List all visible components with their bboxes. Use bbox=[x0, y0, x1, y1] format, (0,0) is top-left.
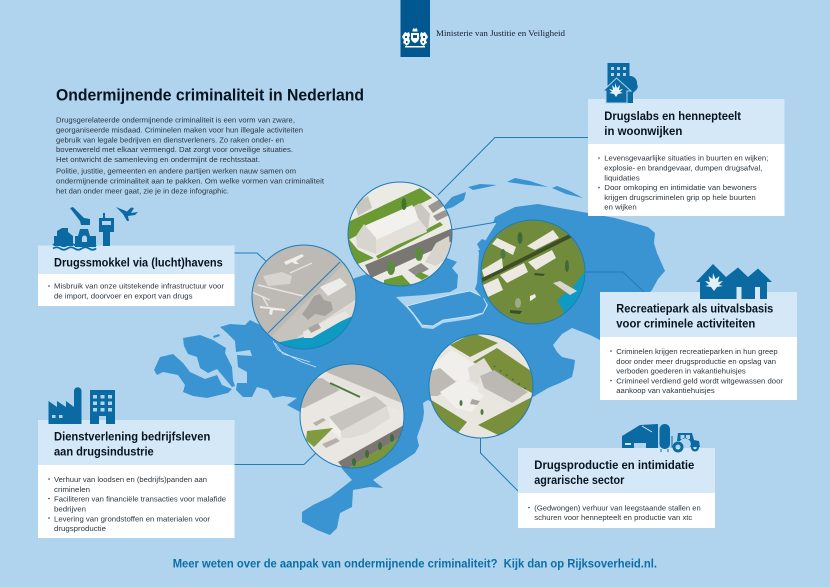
panel: dienstverlening bedrijfsleven: Levering van grondstoffen en materialen voor bbox=[54, 514, 210, 523]
panel: dienstverlening bedrijfsleven: Faciliteren van financiële transacties voor malafide bbox=[54, 495, 226, 504]
panel: drugslabs en hennepteelt: Door omkoping en intimidatie van bewoners bbox=[604, 183, 757, 192]
panel: recreatiepark als uitvalsbasis: Criminelen krijgen recreatieparken in hun greep bbox=[616, 347, 778, 356]
panel: recreatiepark als uitvalsbasis: door onder meer drugsproductie en opslag van bbox=[616, 357, 776, 366]
intro text: georganiseerde misdaad. Criminelen maken voor hun illegale activiteiten bbox=[56, 126, 303, 134]
panel: dienstverlening bedrijfsleven: aan drugsindustrie bbox=[54, 447, 154, 459]
panel: dienstverlening bedrijfsleven: criminelen bbox=[54, 485, 90, 494]
panel: dienstverlening bedrijfsleven bbox=[38, 420, 234, 538]
panel: dienstverlening bedrijfsleven: Dienstverlening bedrijfsleven bbox=[54, 432, 210, 444]
panel: drugslabs en hennepteelt: explosie- en brandgevaar, dumpen drugsafval, bbox=[604, 164, 762, 172]
panel: drugssmokkel via (lucht)havens: Misbruik van onze uitstekende infrastructuur voor bbox=[54, 282, 224, 290]
intro text bbox=[56, 116, 325, 195]
map of the Netherlands bbox=[154, 178, 665, 535]
icon: royal coat of arms bbox=[402, 28, 428, 48]
panel: drugslabs en hennepteelt: en wijken bbox=[604, 203, 637, 212]
panel: drugslabs en hennepteelt: liquidaties bbox=[604, 173, 640, 182]
Zeeland islands bbox=[183, 335, 235, 387]
circle: holiday park bbox=[480, 220, 586, 324]
icon: factory and office building bbox=[48, 387, 115, 424]
intro text: Politie, justitie, gemeenten en andere partijen werken nauw samen om bbox=[56, 167, 296, 176]
panel: drugsproductie en intimidatie bbox=[518, 448, 715, 528]
circle: farm bbox=[428, 332, 534, 440]
circle: industrial buildings bbox=[300, 364, 404, 468]
panel: drugslabs en hennepteelt: Levensgevaarlijke situaties in buurten en wijken; bbox=[604, 154, 768, 163]
icon: apartment block, tree and house with cannabis leaf bbox=[603, 63, 638, 103]
panel: drugsproductie en intimidatie: Drugsproductie en intimidatie bbox=[534, 460, 694, 472]
panel: drugsproductie en intimidatie: agrarische sector bbox=[534, 475, 625, 487]
panel: recreatiepark als uitvalsbasis: Crimineel verdiend geld wordt witgewassen door bbox=[616, 376, 783, 385]
panel: drugslabs en hennepteelt: krijgen drugscriminelen grip op hele buurten bbox=[604, 193, 756, 202]
intro text: het dan onder meer gaat, zie je in deze infographic. bbox=[56, 186, 229, 195]
panel: drugssmokkel via (lucht)havens: Drugssmokkel via (lucht)havens bbox=[54, 258, 223, 270]
intro text: gebruik van legale bedrijven en dienstverleners. Zo raken onder- en bbox=[56, 135, 284, 144]
title: Ondermijnende criminaliteit in Nederland bbox=[56, 86, 364, 104]
intro text: ondermijnende criminaliteit aan te pakken. Om welke vormen van criminaliteit bbox=[56, 176, 325, 186]
panel: recreatiepark als uitvalsbasis: Recreatiepark als uitvalsbasis bbox=[616, 304, 773, 316]
intro text: Het ontwricht de samenleving en ondermijnt de rechtsstaat. bbox=[56, 155, 260, 164]
panel: recreatiepark als uitvalsbasis: voor criminele activiteiten bbox=[616, 319, 755, 331]
IJsselmeer bbox=[396, 222, 497, 329]
panel: dienstverlening bedrijfsleven: drugsproductie bbox=[54, 524, 106, 533]
icon: three houses with cannabis leaf bbox=[696, 264, 772, 299]
panel: drugslabs en hennepteelt: Drugslabs en hennepteelt bbox=[604, 111, 741, 123]
rivers bbox=[273, 341, 316, 367]
icon: barn, silo and tractor bbox=[622, 424, 700, 452]
footer call to action: Meer weten over de aanpak van ondermijnende criminaliteit? Kijk dan op Rijksoverheid.nl. bbox=[173, 557, 657, 571]
panel: drugssmokkel via (lucht)havens: de import, doorvoer en export van drugs bbox=[54, 292, 193, 300]
panel: drugslabs en hennepteelt: in woonwijken bbox=[604, 126, 682, 138]
panel: drugsproductie en intimidatie: (Gedwongen) verhuur van leegstaande stallen en bbox=[534, 503, 701, 512]
intro text: Drugsgerelateerde ondermijnende criminaliteit is een vorm van zware, bbox=[56, 116, 295, 125]
logo ribbon bbox=[400, 0, 430, 57]
panel: dienstverlening bedrijfsleven: bedrijven bbox=[54, 504, 86, 513]
icon: ship, crane, control tower and plane bbox=[53, 207, 138, 250]
circle: harbour and airport bbox=[252, 244, 356, 350]
Flevoland polder bbox=[407, 291, 487, 326]
panel: drugssmokkel via (lucht)havens bbox=[38, 246, 234, 306]
Wadden islands bbox=[443, 178, 583, 209]
panel: drugslabs en hennepteelt bbox=[588, 99, 784, 216]
connector lines bbox=[234, 138, 645, 491]
panel: dienstverlening bedrijfsleven: Verhuur van loodsen en (bedrijfs)panden aan bbox=[54, 475, 207, 484]
panel: recreatiepark als uitvalsbasis bbox=[600, 292, 797, 400]
circle: residential neighbourhood bbox=[346, 180, 454, 290]
intro text: bovenwereld met elkaar vermengd. Dat zorgt voor onveilige situaties. bbox=[56, 145, 293, 154]
panel: drugsproductie en intimidatie: schuren voor hennepteelt en productie van xtc bbox=[534, 513, 692, 522]
panel: recreatiepark als uitvalsbasis: verboden goederen in vakantiehuisjes bbox=[616, 367, 746, 376]
ministry name: Ministerie van Justitie en Veiligheid bbox=[436, 28, 566, 38]
panel: recreatiepark als uitvalsbasis: aankoop van vakantiehuisjes bbox=[616, 386, 715, 395]
